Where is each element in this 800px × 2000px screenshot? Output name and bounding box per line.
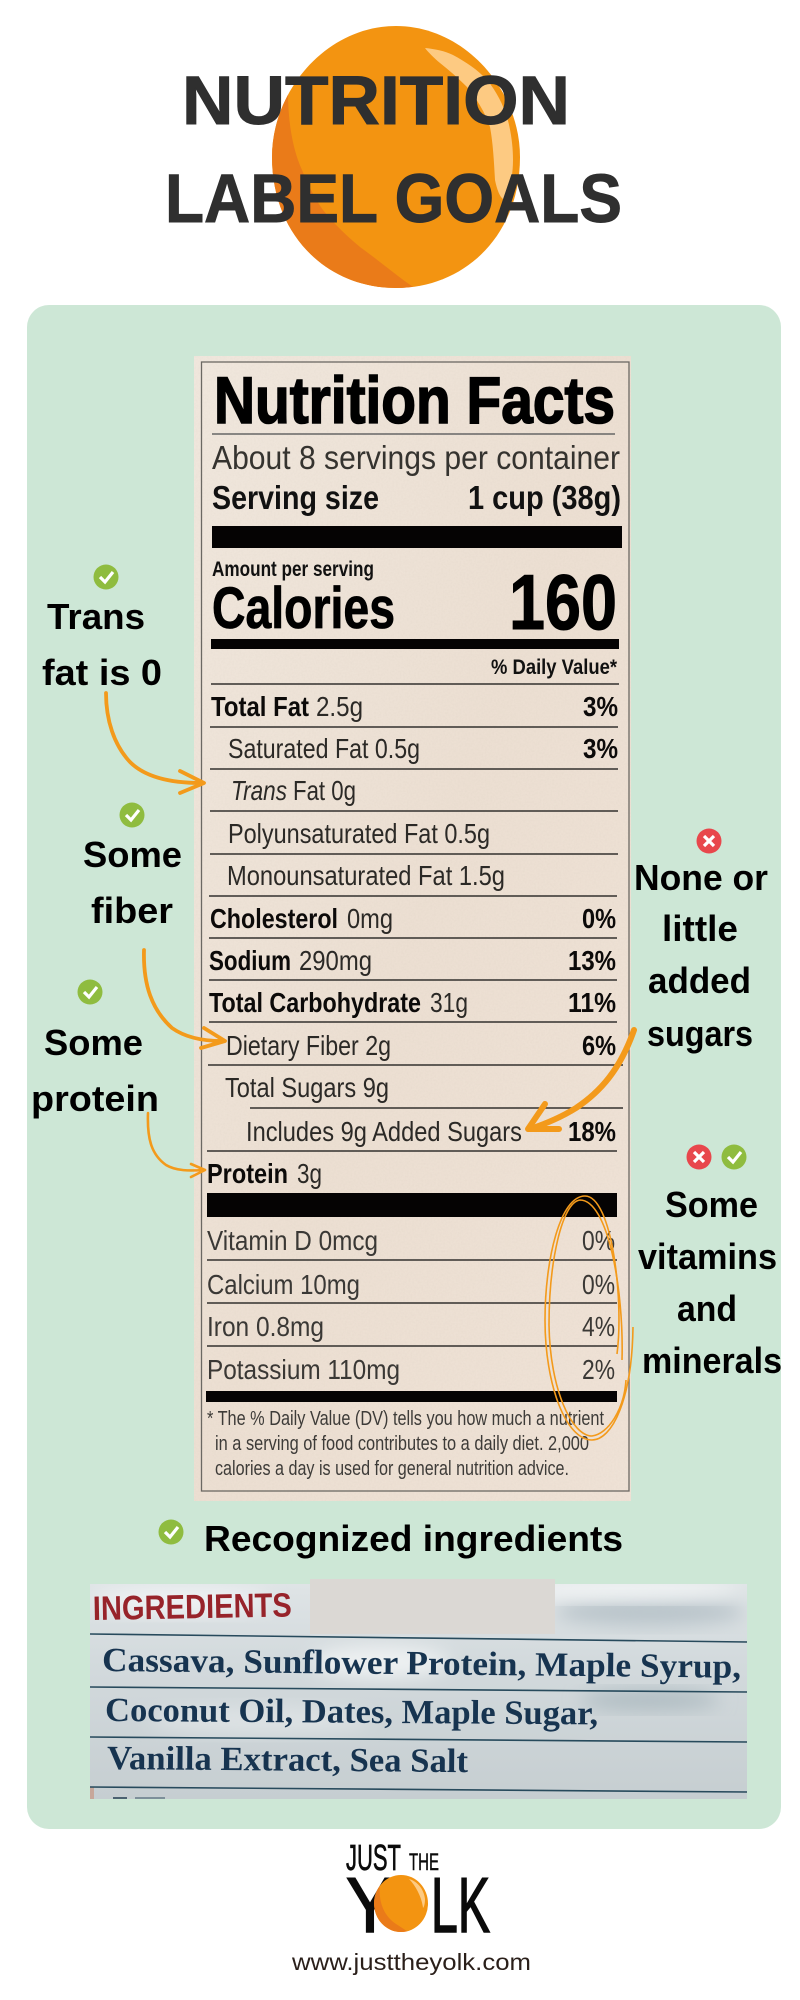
vitamin and mineral rows: 2% bbox=[582, 1354, 615, 1385]
heading: recognized ingredients: Recognized ingredients bbox=[204, 1518, 623, 1559]
panel: nutrition facts label: % Daily Value* bbox=[491, 656, 618, 679]
logo: Just the Yolk: THE bbox=[409, 1849, 439, 1876]
text: ingredient list: Vanilla Extract, Sea Salt bbox=[107, 1740, 469, 1780]
panel: ingredients photo bbox=[90, 1579, 747, 1799]
arrow: fiber bbox=[144, 950, 225, 1048]
nutrient rows: 13% bbox=[568, 945, 616, 976]
label: some protein: protein bbox=[31, 1078, 159, 1119]
icon: green check bbox=[94, 564, 118, 590]
nutrient rows: 0% bbox=[582, 903, 616, 934]
text: calories bbox=[212, 558, 617, 646]
arrow: added sugars bbox=[528, 1030, 634, 1129]
nutrient rows: 0mg bbox=[347, 903, 393, 934]
nutrient rows: 3% bbox=[583, 691, 618, 722]
label: some fiber: fiber bbox=[91, 890, 173, 931]
label: added sugars bbox=[634, 828, 768, 1054]
icon: green check bbox=[78, 980, 102, 1004]
label: added sugars: None or bbox=[634, 857, 768, 898]
arrow: trans fat bbox=[106, 693, 204, 793]
vitamin and mineral rows: 4% bbox=[582, 1311, 615, 1342]
label: added sugars: added bbox=[648, 960, 751, 1001]
vitamin and mineral rows: Iron 0.8mg bbox=[207, 1311, 324, 1342]
text: website url: www.justtheyolk.com bbox=[291, 1949, 531, 1975]
text: servings: 1 cup (38g) bbox=[468, 479, 621, 516]
nutrient rows: Fat 0g bbox=[293, 775, 356, 806]
nutrient rows: Includes 9g Added Sugars bbox=[246, 1116, 522, 1147]
label: some protein: Some bbox=[44, 1022, 143, 1063]
arrow: protein bbox=[148, 1113, 205, 1177]
nutrient rows: 11% bbox=[568, 987, 616, 1018]
nutrient rows: 2.5g bbox=[316, 691, 363, 722]
logo: Just the Yolk bbox=[291, 1837, 531, 1975]
vitamin and mineral rows bbox=[207, 1225, 615, 1385]
icon: green check bbox=[158, 1520, 184, 1544]
nutrient rows: Sodium bbox=[209, 945, 291, 976]
nutrient rows: 18% bbox=[568, 1116, 616, 1147]
label: vitamins and minerals: Some bbox=[665, 1184, 758, 1225]
vitamin and mineral rows: Vitamin D 0mcg bbox=[207, 1225, 378, 1256]
title bbox=[165, 62, 622, 237]
nutrient rows: Monounsaturated Fat 1.5g bbox=[227, 860, 505, 891]
label: trans fat bbox=[42, 564, 162, 693]
title: NUTRITION bbox=[182, 62, 570, 139]
nutrient rows: Polyunsaturated Fat 0.5g bbox=[228, 818, 490, 849]
logo: Just the Yolk: Y bbox=[346, 1861, 394, 1949]
text: servings: Serving size bbox=[212, 479, 379, 516]
nutrient rows: Saturated Fat 0.5g bbox=[228, 733, 420, 764]
text: ingredient list: Cassava, Sunflower Protein, Maple Syrup, bbox=[102, 1642, 741, 1686]
text: ingredients heading: INGREDIENTS bbox=[92, 1587, 292, 1628]
label: trans fat: Trans bbox=[47, 596, 145, 637]
label: some fiber: Some bbox=[83, 834, 182, 875]
text: footnote: calories a day is used for general nutrition advice. bbox=[215, 1458, 569, 1480]
nutrient rows: 31g bbox=[430, 987, 468, 1018]
text: calories: Calories bbox=[212, 576, 395, 641]
text: footnote bbox=[207, 1408, 604, 1480]
nutrient rows: Dietary Fiber 2g bbox=[226, 1030, 391, 1061]
nutrient rows bbox=[207, 691, 618, 1189]
panel: nutrition facts label bbox=[194, 356, 631, 1501]
nutrient rows: 3g bbox=[297, 1158, 322, 1189]
label: some protein bbox=[31, 980, 159, 1119]
text: calories: Amount per serving bbox=[212, 558, 374, 581]
label: added sugars: little bbox=[662, 908, 738, 949]
vitamin and mineral rows: Calcium 10mg bbox=[207, 1269, 360, 1300]
logo: Just the Yolk: JUST bbox=[346, 1837, 401, 1878]
annotation: scribbled oval around vitamins bbox=[545, 1196, 633, 1440]
vitamin and mineral rows: Potassium 110mg bbox=[207, 1354, 400, 1385]
nutrient rows: Total Sugars 9g bbox=[225, 1072, 389, 1103]
icon: red cross bbox=[686, 1144, 712, 1170]
text: ingredient list bbox=[102, 1642, 741, 1780]
nutrient rows: Trans bbox=[231, 775, 287, 806]
heading: Nutrition Facts: Nutrition Facts bbox=[214, 363, 615, 437]
nutrient rows: 6% bbox=[582, 1030, 616, 1061]
nutrient rows: Total Fat bbox=[211, 691, 309, 722]
text: servings: About 8 servings per container bbox=[212, 439, 620, 476]
text: footnote: in a serving of food contributes to a daily diet. 2,000 bbox=[215, 1433, 589, 1455]
icon: red cross bbox=[696, 828, 722, 854]
icon: egg yolk behind title bbox=[272, 26, 520, 288]
text: ingredient list: Coconut Oil, Dates, Maple Sugar, bbox=[105, 1692, 598, 1732]
label: added sugars: sugars bbox=[647, 1013, 753, 1054]
icon: egg yolk letter O bbox=[374, 1875, 428, 1932]
nutrient rows: 290mg bbox=[299, 945, 372, 976]
icon: green check bbox=[120, 802, 144, 828]
nutrient rows: 3% bbox=[583, 733, 618, 764]
text: servings bbox=[212, 439, 621, 516]
label: vitamins and minerals: and bbox=[677, 1288, 737, 1329]
nutrient rows: Total Carbohydrate bbox=[209, 987, 421, 1018]
logo: Just the Yolk: LK bbox=[431, 1861, 490, 1949]
vitamin and mineral rows: 0% bbox=[582, 1269, 615, 1300]
text: footnote: * The % Daily Value (DV) tells you how much a nutrient bbox=[207, 1408, 604, 1430]
text: calories: 160 bbox=[509, 558, 617, 646]
label: some fiber bbox=[83, 802, 182, 931]
label: vitamins and minerals: vitamins bbox=[638, 1236, 777, 1277]
vitamin and mineral rows: 0% bbox=[582, 1225, 615, 1256]
label: trans fat: fat is 0 bbox=[42, 652, 162, 693]
nutrient rows: Protein bbox=[207, 1158, 288, 1189]
title: LABEL GOALS bbox=[165, 160, 622, 237]
icon: green check bbox=[722, 1144, 746, 1170]
redaction patch bbox=[310, 1579, 555, 1634]
label: vitamins and minerals: minerals bbox=[642, 1340, 782, 1381]
nutrient rows: Cholesterol bbox=[210, 903, 338, 934]
panel: green background bbox=[27, 305, 781, 1829]
label: vitamins and minerals bbox=[638, 1144, 782, 1381]
